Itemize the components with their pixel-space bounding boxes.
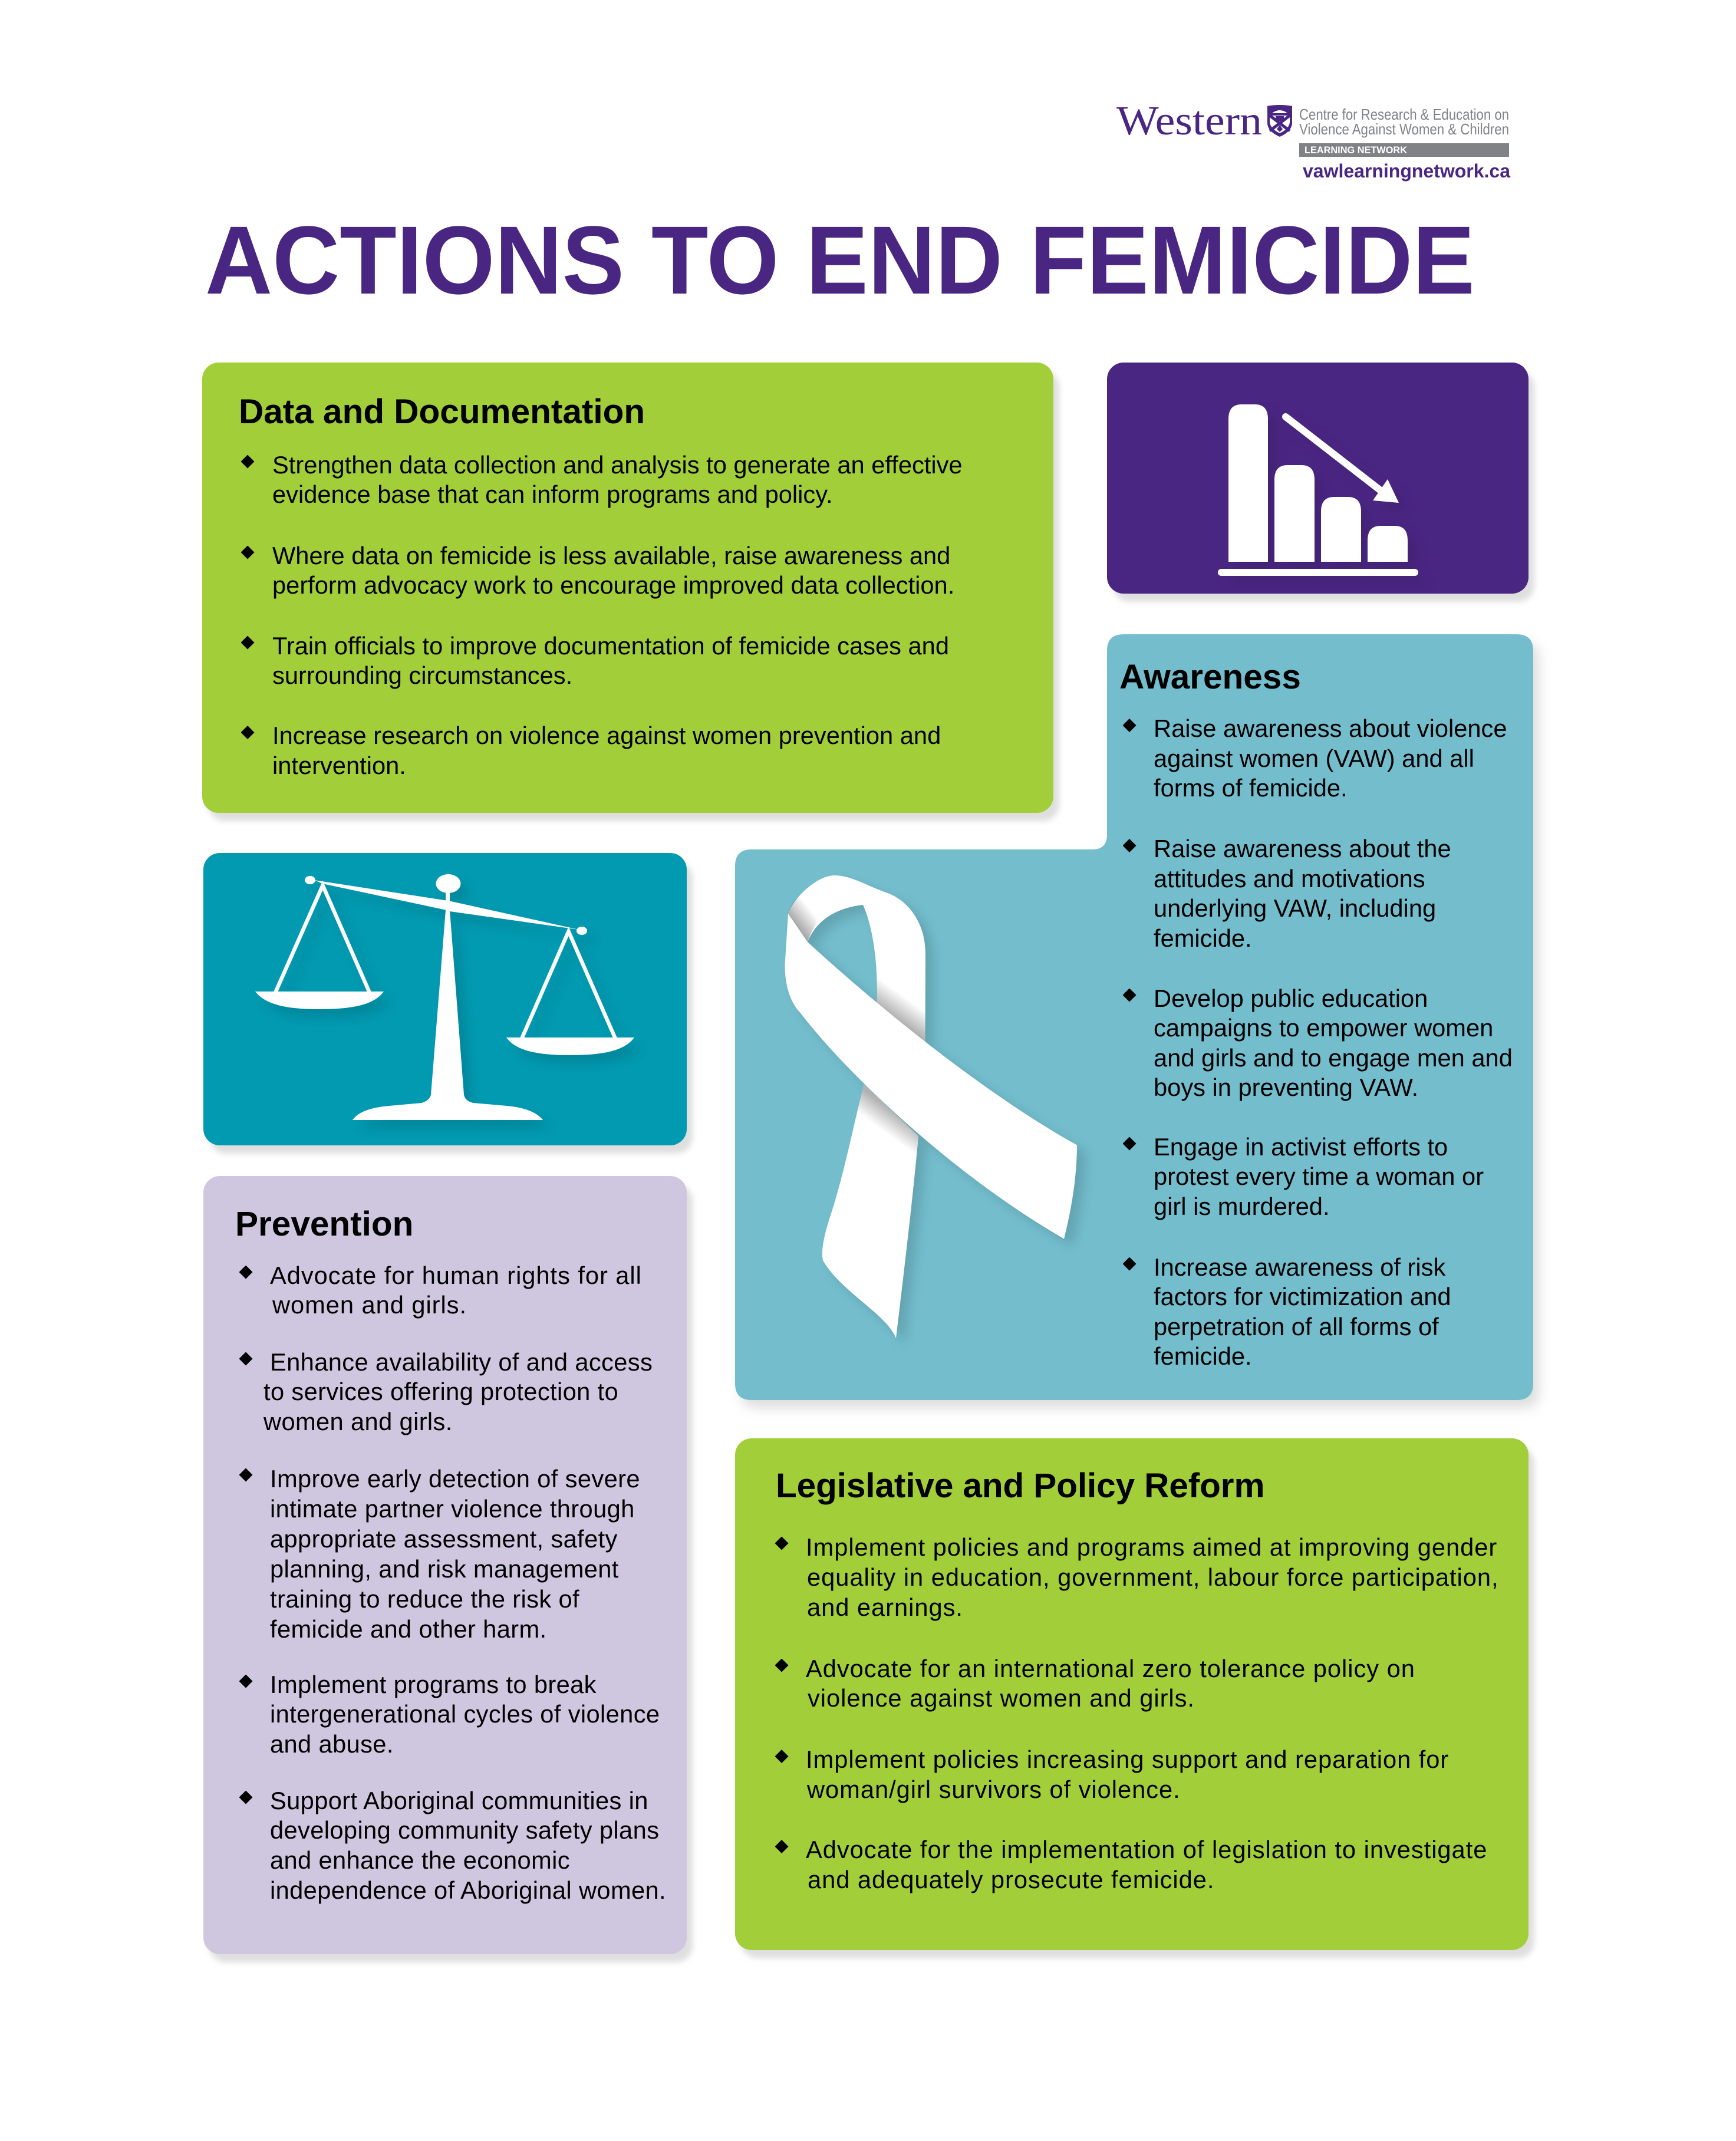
bullet: femicide. [1154,1342,1252,1370]
bullet: factors for victimization and [1154,1283,1451,1310]
bullet [241,632,949,689]
bullet: intergenerational cycles of violence [270,1700,660,1728]
bullet: surrounding circumstances. [272,661,572,689]
bullet [241,722,941,779]
bullet: Strengthen data collection and analysis to generate an effective [272,450,963,479]
bullet: developing community safety plans [270,1816,659,1844]
bullet: femicide. [1154,924,1252,951]
bullet: Train officials to improve documentation of femicide cases and [272,632,949,659]
bullet: women and girls. [263,1408,453,1435]
bullet: girl is murdered. [1154,1192,1330,1220]
bullet: woman/girl survivors of violence. [807,1776,1181,1803]
bullet [241,541,954,599]
bullet: attitudes and motivations [1154,864,1425,892]
logo: Western Centre for Research and Education [1116,98,1510,182]
bullet: women and girls. [272,1291,467,1319]
bullet: violence against women and girls. [808,1684,1195,1712]
banner: learning network: LEARNING NETWORK [1305,144,1408,156]
bullet: Implement programs to break [270,1671,597,1698]
text: centre name [1299,106,1509,138]
icon: declining bar chart with arrow [1218,404,1418,576]
bullet: appropriate assessment, safety [270,1524,618,1553]
bullet [1123,714,1507,802]
bullet [1123,1253,1451,1370]
icon: Western shield [1267,105,1292,137]
text: centre name: Centre for Research & Education on [1299,106,1509,123]
bullet: Improve early detection of severe [270,1464,640,1493]
bullet: Support Aboriginal communities in [270,1786,648,1814]
bullet: Implement policies increasing support and reparation for [806,1745,1449,1773]
panel: awareness [735,634,1543,1412]
bullet: and adequately prosecute femicide. [808,1865,1214,1893]
title: ACTIONS TO END FEMICIDE [205,206,1475,314]
panel: legislative and policy reform [735,1438,1529,1950]
bullet: training to reduce the risk of [270,1585,579,1613]
icon: scales [255,874,637,1130]
bullet: campaigns to empower women [1154,1014,1493,1042]
bullet: and earnings. [807,1593,963,1621]
bullet: Engage in activist efforts to [1154,1133,1448,1160]
bullet: evidence base that can inform programs and policy. [272,480,833,508]
panel: scales of justice icon [203,853,687,1145]
heading: legislative and policy reform: Legislative and Policy Reform [776,1467,1264,1505]
bullet: Develop public education [1154,984,1428,1012]
bullet [239,1348,653,1435]
bullet: and girls and to engage men and [1154,1043,1513,1072]
bullet: Advocate for the implementation of legislation to investigate [806,1836,1487,1863]
icon: awareness ribbon [785,875,1088,1339]
bullet [239,1261,642,1319]
bullet: and enhance the economic [270,1846,570,1874]
panel background: L-shaped [735,634,1543,1412]
panel: bar chart icon [1107,363,1529,594]
bullet: intimate partner violence through [270,1495,635,1522]
bullet: and abuse. [270,1730,394,1758]
heading: awareness: Awareness [1119,658,1301,696]
bullet: forms of femicide. [1154,774,1348,802]
bullet [239,1786,666,1904]
panel: data and documentation [202,363,1053,813]
bullet: Increase awareness of risk [1154,1253,1445,1280]
heading: prevention: Prevention [235,1205,413,1243]
bullet: Increase research on violence against women prevention and [272,722,941,749]
bullet [239,1464,640,1642]
bullet: Raise awareness about violence [1154,714,1507,742]
bullet [775,1654,1415,1712]
bullet [775,1533,1499,1621]
bullet: protest every time a woman or [1154,1162,1484,1190]
bullet [241,450,963,508]
bullet: Advocate for human rights for all [270,1261,642,1289]
text: website: vawlearningnetwork.ca [1303,160,1510,182]
bullet: perpetration of all forms of [1154,1312,1439,1340]
bullet: Enhance availability of and access [270,1348,653,1376]
bullet: Where data on femicide is less available, raise awareness and [272,541,950,569]
bullet: Raise awareness about the [1154,835,1451,862]
bullet: planning, and risk management [270,1555,619,1582]
bullet: against women (VAW) and all [1154,744,1474,772]
bullet: underlying VAW, including [1154,894,1436,922]
bullet: equality in education, government, labour force participation, [807,1563,1499,1590]
bullet: Implement policies and programs aimed at improving gender [806,1533,1497,1561]
text: centre name: Violence Against Women & Children [1299,120,1509,138]
bullet: perform advocacy work to encourage improved data collection. [272,571,954,599]
bullet [1123,984,1513,1101]
bullet [775,1745,1449,1803]
bullet: to services offering protection to [263,1378,618,1405]
bullet [1123,835,1451,951]
bullet: Advocate for an international zero tolerance policy on [806,1654,1415,1682]
bullet [775,1836,1487,1893]
bullet [239,1671,660,1758]
bullet [1123,1133,1484,1220]
bullet: independence of Aboriginal women. [270,1876,666,1904]
panel: prevention [203,1176,687,1954]
bullet: femicide and other harm. [270,1615,546,1642]
bullet: intervention. [272,751,406,779]
heading: data and documentation: Data and Documentation [239,393,645,431]
bullet: boys in preventing VAW. [1154,1073,1418,1101]
banner: learning network [1299,143,1509,157]
wordmark: Western: Western [1116,98,1262,144]
